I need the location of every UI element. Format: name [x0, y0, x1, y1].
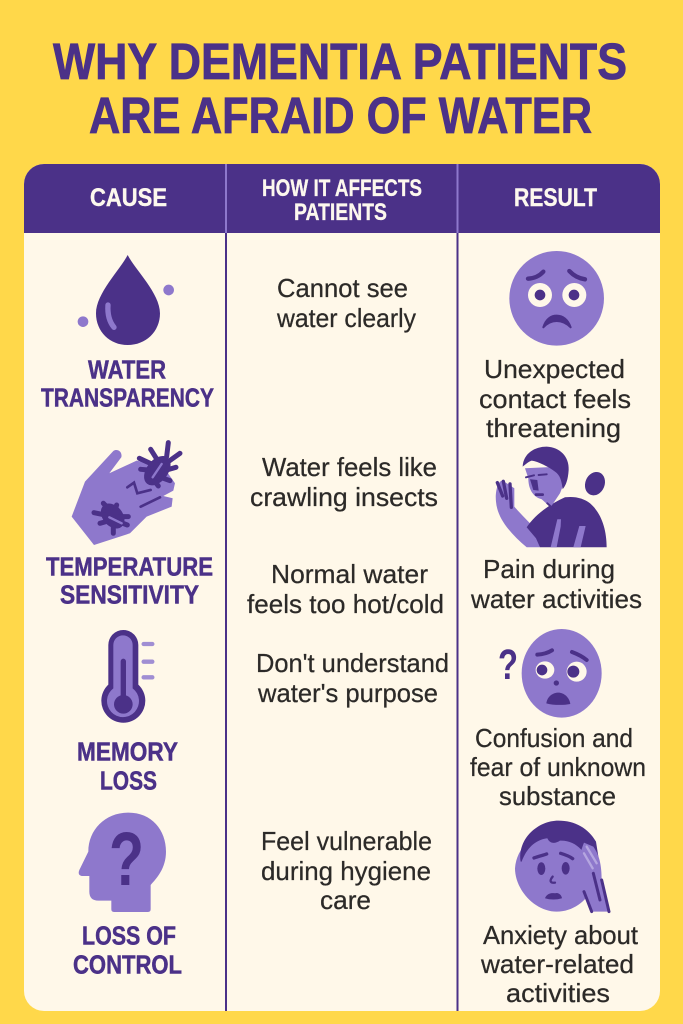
text: normal water feels too hot or cold	[247, 559, 444, 619]
text: confusion and fear of unknown substance: fear of unknown	[470, 752, 646, 782]
text: water feels like crawling insects: crawling insects	[250, 482, 438, 512]
text: confusion and fear of unknown substance	[470, 723, 646, 811]
heading: how it affects patients column	[262, 175, 422, 226]
panel: table	[24, 164, 660, 1011]
icon: water drop	[78, 255, 174, 345]
text: cannot see water clearly	[276, 273, 416, 333]
label: water transparency	[41, 354, 214, 412]
text: unexpected contact feels threatening: Unexpected	[484, 354, 625, 384]
text: feel vulnerable during hygiene care	[261, 826, 432, 915]
text: don't understand water's purpose	[256, 648, 449, 708]
icon text: question mark in head: ?	[109, 817, 144, 902]
title: ARE AFRAID OF WATER	[89, 87, 592, 144]
heading: cause column: CAUSE	[90, 184, 167, 212]
label: water transparency: TRANSPARENCY	[41, 382, 214, 412]
label: loss of control: LOSS OF	[82, 920, 176, 950]
label: water transparency: WATER	[88, 354, 166, 384]
text: confusion and fear of unknown substance: Confusion and	[475, 723, 633, 753]
label: memory loss: MEMORY	[77, 736, 178, 766]
heading: how it affects patients column: HOW IT AFFECTS	[262, 175, 422, 202]
label: memory loss	[77, 736, 178, 796]
text: confusion and fear of unknown substance: substance	[499, 781, 616, 811]
text: cannot see water clearly: Cannot see	[277, 273, 408, 303]
label: temperature sensitivity: SENSITIVITY	[60, 580, 199, 610]
text: pain during water activities	[470, 554, 642, 614]
text: unexpected contact feels threatening: threatening	[486, 413, 621, 443]
text: don't understand water's purpose: water's purpose	[257, 678, 438, 708]
label: temperature sensitivity: TEMPERATURE	[46, 552, 213, 582]
text: feel vulnerable during hygiene care: Feel vulnerable	[261, 826, 432, 856]
text: water feels like crawling insects: Water feels like	[262, 452, 437, 482]
title	[53, 33, 627, 144]
icon: thermometer	[101, 630, 152, 723]
label: loss of control	[73, 920, 182, 980]
icon: question mark beside face: ?	[498, 641, 518, 689]
label: memory loss: LOSS	[100, 766, 157, 796]
text: unexpected contact feels threatening	[479, 354, 631, 443]
text: anxiety about water-related activities: water-related	[480, 949, 634, 979]
label: temperature sensitivity	[46, 552, 213, 610]
label: loss of control: CONTROL	[73, 950, 182, 980]
text: anxiety about water-related activities: activities	[506, 978, 610, 1008]
heading: how it affects patients column: PATIENTS	[294, 199, 387, 226]
text: feel vulnerable during hygiene care: care	[320, 885, 371, 915]
text: anxiety about water-related activities: Anxiety about	[483, 920, 639, 950]
text: pain during water activities: water activities	[470, 584, 642, 614]
text: don't understand water's purpose: Don't understand	[256, 648, 449, 678]
heading: result column: RESULT	[514, 184, 597, 212]
icon: person recoiling	[496, 447, 608, 547]
text: normal water feels too hot or cold: feels too hot/cold	[247, 589, 444, 619]
icon: head with question mark	[79, 813, 166, 912]
text: anxiety about water-related activities	[480, 920, 639, 1008]
text: pain during water activities: Pain during	[483, 554, 615, 584]
icon: anxious person holding head	[515, 821, 609, 912]
text: cannot see water clearly: water clearly	[276, 303, 416, 333]
text: normal water feels too hot or cold: Normal water	[271, 559, 428, 589]
text: water feels like crawling insects	[250, 452, 438, 512]
text: unexpected contact feels threatening: contact feels	[479, 384, 631, 414]
icon: frightened face	[509, 251, 604, 346]
icon: hand with insects	[72, 443, 180, 545]
icon: confused face	[522, 629, 602, 718]
text: feel vulnerable during hygiene care: during hygiene	[261, 856, 431, 886]
